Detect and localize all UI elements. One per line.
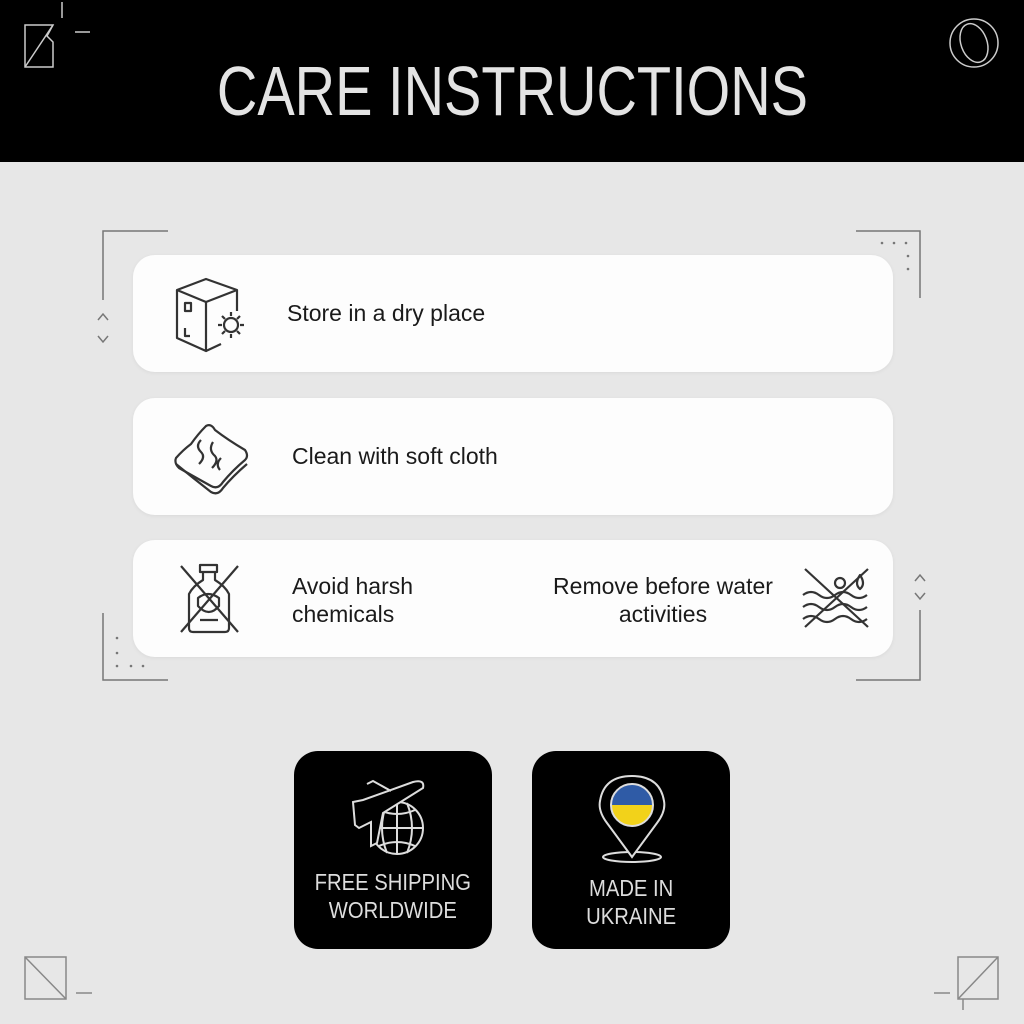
badge: made in ukraine	[532, 751, 730, 949]
text: remove before water activities: Remove before water	[553, 573, 773, 599]
text: Clean with soft cloth	[292, 443, 498, 469]
icon: corner mark bottom-right	[934, 956, 999, 1010]
card: chemicals and water	[133, 540, 893, 657]
text: remove before water activities: activities	[619, 601, 707, 627]
text: WORLDWIDE	[329, 897, 457, 923]
text: UKRAINE	[586, 903, 676, 929]
title: CARE INSTRUCTIONS	[216, 52, 808, 130]
text: avoid harsh chemicals	[292, 573, 413, 627]
text: remove before water activities	[553, 573, 773, 627]
icon: rings top-right	[949, 18, 999, 68]
text: FREE SHIPPING	[315, 869, 471, 895]
card: clean with soft cloth	[133, 398, 893, 515]
text: MADE IN	[589, 875, 673, 901]
badge: free shipping	[294, 751, 492, 949]
icon: crossed bottle	[180, 564, 239, 634]
decorative bracket frames	[98, 230, 926, 681]
text: avoid harsh chemicals: Avoid harsh	[292, 573, 413, 599]
icon: plane and globe	[352, 780, 424, 855]
icon: pin with flag	[598, 775, 666, 863]
icon: cloth	[174, 424, 248, 494]
card: store in a dry place	[133, 255, 893, 372]
icon: corner mark bottom-left	[24, 956, 92, 1000]
icon: corner mark top-left	[24, 2, 90, 68]
text: Store in a dry place	[287, 300, 485, 326]
text	[315, 869, 471, 923]
text: avoid harsh chemicals: chemicals	[292, 601, 394, 627]
text	[586, 875, 676, 929]
icon: box with sun	[176, 278, 244, 352]
icon: crossed water activities	[802, 568, 869, 628]
header bar	[0, 0, 1024, 162]
